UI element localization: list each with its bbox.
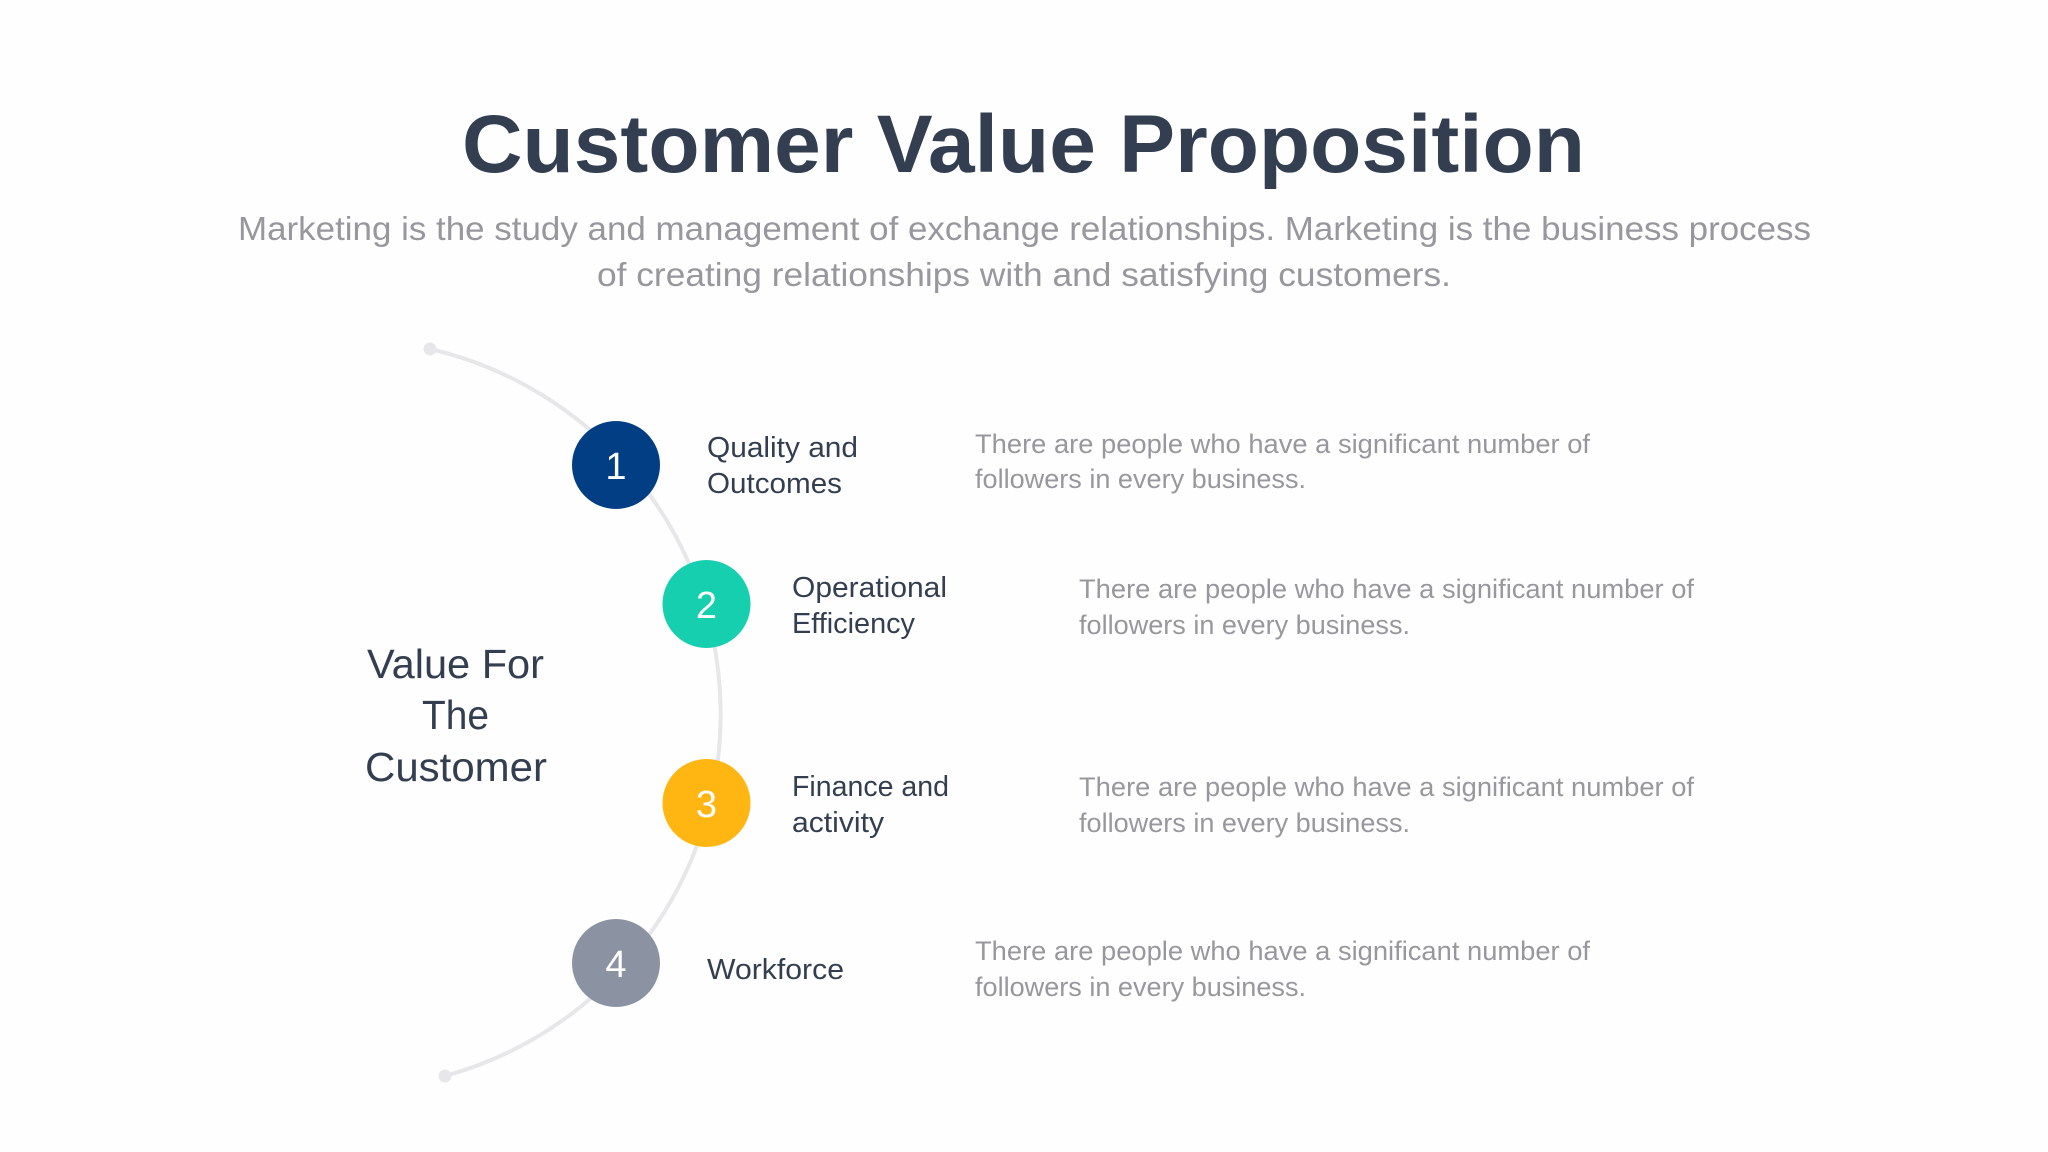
description 2: There are people who have a significant number of	[1079, 574, 1695, 604]
label 1	[707, 432, 858, 500]
label 2: Efficiency	[792, 608, 916, 640]
description 2: followers in every business.	[1079, 610, 1410, 640]
description 1: followers in every business.	[975, 464, 1306, 494]
central label: value for the customer: Value For	[367, 641, 544, 687]
title: Customer Value Proposition	[462, 99, 1585, 190]
subtitle: of creating relationships with and satisfying customers.	[597, 256, 1451, 293]
central label: value for the customer	[365, 641, 547, 790]
number badge 1: 1	[605, 446, 627, 488]
number badge 1	[572, 421, 660, 509]
label 3: activity	[792, 807, 885, 839]
number badge 3: 3	[696, 784, 717, 826]
item 3: finance and activity	[662, 759, 1695, 847]
subtitle: Marketing is the study and management of exchange relationships. Marketing is the business process	[238, 210, 1811, 247]
label 2	[792, 572, 947, 640]
number badge 3	[662, 759, 750, 847]
description 1	[975, 429, 1591, 494]
subtitle	[238, 210, 1811, 293]
description 4	[975, 936, 1591, 1002]
item 4: workforce	[572, 919, 1591, 1007]
label 4: Workforce	[707, 954, 844, 986]
central label: value for the customer: Customer	[365, 744, 547, 790]
number badge 4: 4	[605, 944, 627, 986]
item 2: operational efficiency	[662, 560, 1695, 648]
description 3	[1079, 772, 1695, 838]
number badge 4	[572, 919, 660, 1007]
curved timeline arc	[424, 342, 721, 1082]
number badge 2: 2	[696, 585, 717, 627]
description 3: followers in every business.	[1079, 808, 1410, 838]
label 3	[792, 771, 949, 839]
label 2: Operational	[792, 572, 947, 604]
description 1: There are people who have a significant number of	[975, 429, 1591, 459]
label 1: Outcomes	[707, 468, 842, 500]
central label: value for the customer: The	[422, 692, 489, 738]
description 3: There are people who have a significant number of	[1079, 772, 1695, 802]
label 3: Finance and	[792, 771, 949, 803]
item 1: quality and outcomes	[572, 421, 1591, 509]
description 2	[1079, 574, 1695, 640]
description 4: followers in every business.	[975, 972, 1306, 1002]
number badge 2	[662, 560, 750, 648]
label 1: Quality and	[707, 432, 858, 464]
description 4: There are people who have a significant number of	[975, 936, 1591, 966]
